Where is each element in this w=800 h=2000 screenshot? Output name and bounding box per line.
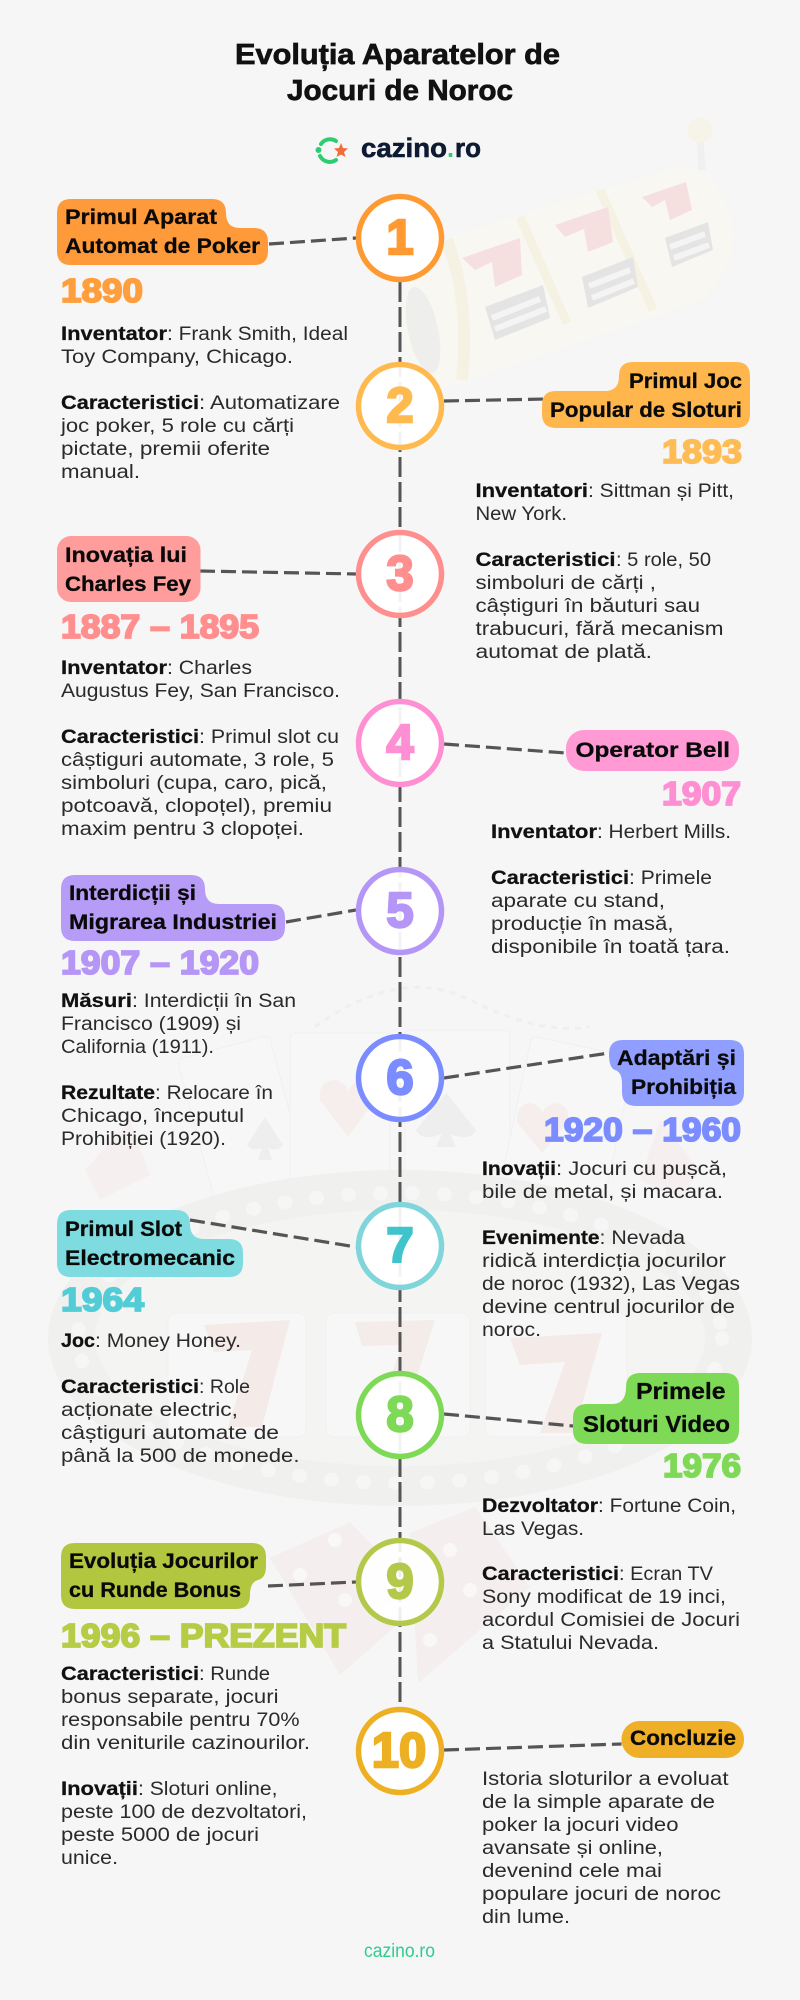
heading 7 [57,1210,243,1277]
text block 5: Rezultate [61,1083,155,1104]
panel 8: Primele Sloturi Video [358,1373,741,1654]
text block 1: pictate, premii oferite [61,439,270,460]
panel 10: Concluzie [358,1710,744,1928]
year 3: 1887 – 1895 [61,608,259,645]
title: Jocuri de Noroc [287,75,513,107]
connector 8 [444,1414,573,1426]
text block 7: până la 500 de monede. [61,1446,300,1467]
text block 2: : 5 role, 50 [616,550,711,571]
text block 8: Dezvoltator [482,1496,599,1517]
text block 9: : Runde [199,1664,270,1685]
logo: cazino.ro: ro [455,133,481,163]
panel 9: Evoluția Jocurilor cu Runde Bonus [61,1540,442,1869]
heading 9 [61,1543,266,1609]
marker 8: 8 [386,1388,414,1442]
footer: cazino.ro: cazino.ro [364,1941,435,1962]
text block 2: New York. [476,504,567,525]
text block 9: Caracteristici [61,1664,199,1685]
text block 10: Istoria sloturilor a evoluat [482,1769,729,1790]
title [235,39,560,107]
marker 3: 3 [386,547,414,601]
marker 8 [358,1374,442,1456]
text block 2: Caracteristici [476,550,616,571]
text block 6 [482,1159,740,1341]
year 4: 1907 [662,775,741,812]
text block 3: Inventator [61,658,168,679]
marker 4 [358,702,442,784]
logo: cazino.ro [316,133,481,163]
text block 9: peste 5000 de jocuri [61,1825,259,1846]
marker 6 [358,1036,442,1120]
heading 10: Concluzie [630,1726,736,1750]
text block 6: noroc. [482,1320,541,1341]
text block 7: acționate electric, [61,1400,238,1421]
heading 8 [573,1373,739,1444]
text block 1: : Frank Smith, Ideal [167,324,348,345]
text block 9: unice. [61,1848,118,1869]
text block 9: responsabile pentru 70% [61,1710,300,1731]
year 1: 1890 [61,272,143,309]
panel 4: Operator Bell [358,702,741,958]
heading 3: Inovația lui [65,543,187,567]
title: Evoluția Aparatelor de [235,39,560,71]
text block 3 [61,658,340,840]
connector 4 [444,744,566,753]
heading 2: Primul Joc [629,369,742,393]
text block 5: : Relocare în [155,1083,273,1104]
text block 7: câștiguri automate de [61,1423,279,1444]
heading 3: Charles Fey [65,572,191,596]
heading 10 [622,1721,744,1758]
text block 3: maxim pentru 3 clopoței. [61,819,304,840]
connector 7 [190,1220,356,1247]
text block 3: : Primul slot cu [199,727,339,748]
text block 9: bonus separate, jocuri [61,1687,278,1708]
timeline vertical line [398,282,402,1706]
marker 7 [358,1204,442,1288]
heading 4 [566,730,739,771]
text block 5: : Interdicții în San [132,991,296,1012]
text block 1: Toy Company, Chicago. [61,347,293,368]
heading 9: Evoluția Jocurilor [69,1549,259,1573]
text block 2: Inventatori [476,481,588,502]
text block 2: automat de plată. [476,642,652,663]
heading 2: Popular de Sloturi [550,398,742,422]
panel 2: Primul Joc Popular de Sloturi [358,362,750,663]
text block 8: Las Vegas. [482,1519,584,1540]
text block 6: bile de metal, și macara. [482,1182,723,1203]
panel 6: Adaptări și Prohibiția [358,1036,744,1341]
marker 9: 9 [386,1555,414,1609]
text block 4: disponibile în toată țara. [491,937,730,958]
text block 5: Măsuri [61,991,132,1012]
heading 5: Interdicții și [69,881,196,905]
text block 9: : Sloturi online, [138,1779,278,1800]
text block 4 [491,822,731,958]
text block 2: simboluri de cărți , [476,573,656,594]
panel 3: Inovația lui Charles Fey [57,532,442,840]
text block 9 [61,1664,310,1869]
text block 2: : Sittman și Pitt, [588,481,734,502]
heading 7: Electromecanic [65,1246,235,1270]
marker 5: 5 [386,884,414,938]
panel 1: Primul Aparat Automat de Poker [57,196,442,483]
heading 1 [57,199,268,265]
text block 9: peste 100 de dezvoltatori, [61,1802,307,1823]
marker 1: 1 [386,211,414,265]
heading 6: Prohibiția [631,1075,737,1099]
text block 3: simboluri (cupa, caro, pică, [61,773,327,794]
heading 3 [57,536,200,602]
logo: cazino.ro: . [447,133,454,163]
connector 10 [444,1744,622,1750]
text block 5 [61,991,296,1150]
text block 5: California (1911). [61,1037,214,1058]
marker 7: 7 [386,1219,414,1273]
year 8: 1976 [663,1447,741,1484]
text block 8: a Statului Nevada. [482,1633,659,1654]
text block 8 [482,1496,740,1654]
text block 8: : Ecran TV [619,1564,713,1585]
text block 10 [482,1769,729,1928]
heading 8: Sloturi Video [583,1411,730,1437]
text block 10: poker la jocuri video [482,1815,678,1836]
heading 4: Operator Bell [576,738,730,762]
text block 4: aparate cu stand, [491,891,665,912]
text block 8: Sony modificat de 19 inci, [482,1587,726,1608]
text block 2: trabucuri, fără mecanism [476,619,724,640]
text block 6: devine centrul jocurilor de [482,1297,735,1318]
text block 4: producție în masă, [491,914,674,935]
text block 9: Inovații [61,1779,138,1800]
connector 6 [444,1053,609,1078]
text block 6: ridică interdicția jocurilor [482,1251,727,1272]
text block 1: manual. [61,462,140,483]
heading 5: Migrarea Industriei [69,910,277,934]
marker 9 [358,1540,442,1624]
text block 8: : Fortune Coin, [598,1496,736,1517]
year 2: 1893 [662,433,742,470]
marker 2 [358,364,442,448]
text block 4: Inventator [491,822,598,843]
marker 3 [358,532,442,616]
text block 4: : Herbert Mills. [597,822,731,843]
marker 2: 2 [386,379,414,433]
watermark: slot machine reels [399,118,733,387]
text block 7 [61,1331,300,1467]
heading 7: Primul Slot [65,1217,182,1241]
heading 5 [61,875,285,941]
text block 6: Evenimente [482,1228,600,1249]
heading 9: cu Runde Bonus [69,1578,241,1602]
text block 6: de noroc (1932), Las Vegas [482,1274,740,1295]
text block 5: Prohibiției (1920). [61,1129,226,1150]
year 6: 1920 – 1960 [544,1111,741,1148]
heading 2 [542,362,750,428]
text block 2: câștiguri în băuturi sau [476,596,700,617]
text block 3: : Charles [167,658,252,679]
text block 3: Augustus Fey, San Francisco. [61,681,340,702]
marker 10 [358,1710,442,1792]
marker 6: 6 [386,1051,414,1105]
text block 4: : Primele [629,868,712,889]
text block 10: de la simple aparate de [482,1792,715,1813]
panel 7: Primul Slot Electromecanic [57,1204,442,1467]
marker 1 [358,196,442,280]
heading 6 [609,1040,744,1106]
panel 5: Interdicții și Migrarea Industriei [61,870,442,1150]
text block 1: Inventator [61,324,168,345]
heading 1: Primul Aparat [65,205,217,229]
text block 10: devenind cele mai [482,1861,662,1882]
text block 1 [60,324,348,483]
text block 7: Joc [61,1331,95,1352]
text block 1: Caracteristici [61,393,199,414]
logo: cazino.ro: cazino [361,133,447,163]
heading 8: Primele [636,1378,726,1404]
watermark: playing cards [85,987,700,1205]
marker 4: 4 [386,716,414,770]
watermark: roulette wheel with sevens [48,1170,752,1506]
year 9: 1996 – PREZENT [61,1617,346,1654]
text block 10: avansate și online, [482,1838,663,1859]
heading 6: Adaptări și [617,1046,736,1070]
year 5: 1907 – 1920 [61,944,259,981]
text block 8: Caracteristici [482,1564,619,1585]
text block 7: : Money Honey. [95,1331,241,1352]
text block 9: din veniturile cazinourilor. [61,1733,310,1754]
text block 5: Francisco (1909) și [61,1014,241,1035]
text block 4: Caracteristici [491,868,629,889]
year 7: 1964 [61,1281,145,1318]
text block 7: : Role [199,1377,250,1398]
marker 5 [358,870,442,952]
connector 3 [200,571,356,574]
text block 1: : Automatizare [199,393,340,414]
text block 8: acordul Comisiei de Jocuri [482,1610,740,1631]
text block 5: Chicago, începutul [61,1106,244,1127]
text block 6: : Nevada [600,1228,685,1249]
watermark: dice [270,1507,530,1683]
text block 3: Caracteristici [61,727,199,748]
text block 7: Caracteristici [61,1377,199,1398]
connector 9 [268,1582,356,1586]
text block 10: din lume. [482,1907,570,1928]
connector 2 [444,399,546,401]
text block 1: joc poker, 5 role cu cărți [60,416,294,437]
text block 2 [476,481,734,663]
heading 1: Automat de Poker [65,234,261,258]
text block 3: câștiguri automate, 3 role, 5 [61,750,334,771]
marker 10: 10 [372,1724,426,1778]
text block 10: populare jocuri de noroc [482,1884,721,1905]
text block 6: Inovații [482,1159,556,1180]
connector 5 [286,910,356,922]
text block 3: potcoavă, clopoțel), premiu [61,796,332,817]
connector 1 [269,238,356,244]
text block 6: : Jocuri cu pușcă, [556,1159,727,1180]
